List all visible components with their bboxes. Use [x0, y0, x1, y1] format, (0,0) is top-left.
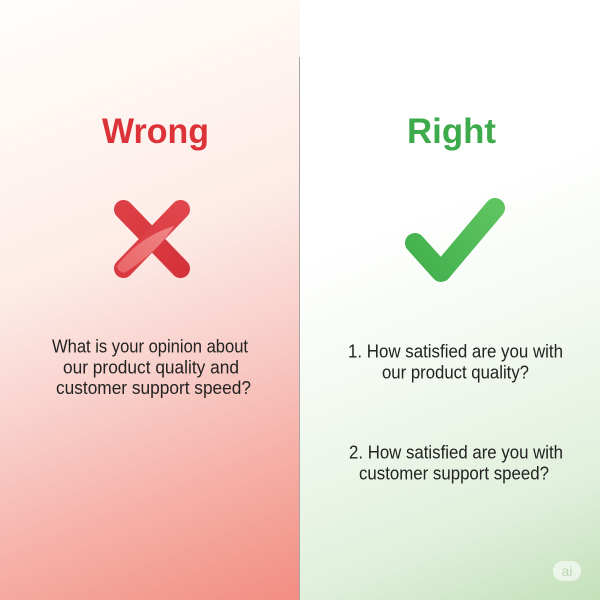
- text: first right question: our product quality?: [382, 362, 529, 382]
- text: wrong question: [52, 336, 251, 398]
- heading: Wrong: Wrong: [102, 112, 209, 151]
- heading: Right: Right: [407, 112, 496, 151]
- icon: green check mark: [415, 208, 495, 272]
- panel: right: [300, 0, 600, 600]
- text: wrong question: customer support speed?: [56, 377, 251, 398]
- text: second right question: 2. How satisfied are you with: [349, 442, 563, 462]
- text: second right question: [349, 442, 563, 484]
- badge: ai watermark: ai: [562, 563, 572, 579]
- text: first right question: 1. How satisfied are you with: [348, 340, 563, 362]
- text: wrong question: What is your opinion about: [52, 336, 248, 356]
- text: second right question: customer support speed?: [359, 462, 549, 484]
- icon: red cross: [117, 210, 180, 273]
- text: first right question: [348, 340, 563, 382]
- text: wrong question: our product quality and: [63, 356, 239, 378]
- badge: ai watermark: [553, 561, 581, 581]
- panel: wrong: [0, 0, 300, 600]
